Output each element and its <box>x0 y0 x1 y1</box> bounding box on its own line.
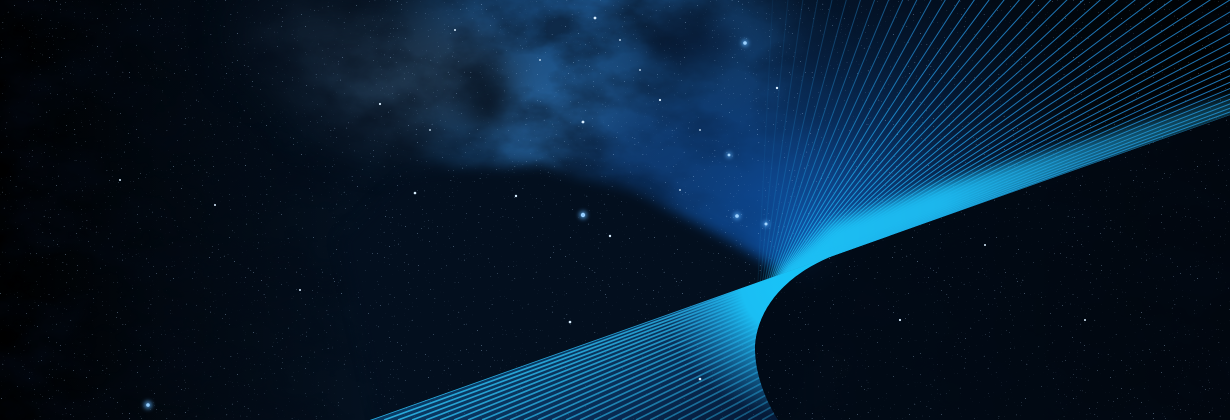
bright band along the upper edge <box>770 95 1230 282</box>
star glows <box>144 40 769 409</box>
nebula: dark dust patches <box>461 14 738 132</box>
lower right dark region <box>755 115 1230 420</box>
bright stars <box>119 17 1086 407</box>
bright core where the lines converge <box>370 255 835 420</box>
lower fan fill <box>370 255 835 420</box>
nebula: lower dark dust cloud <box>340 165 800 420</box>
glow behind the upper fan <box>523 0 1070 274</box>
upper fan of light lines <box>758 0 1230 282</box>
nebula: blue gas cloud <box>245 0 820 270</box>
lower fan of light lines <box>370 256 832 420</box>
